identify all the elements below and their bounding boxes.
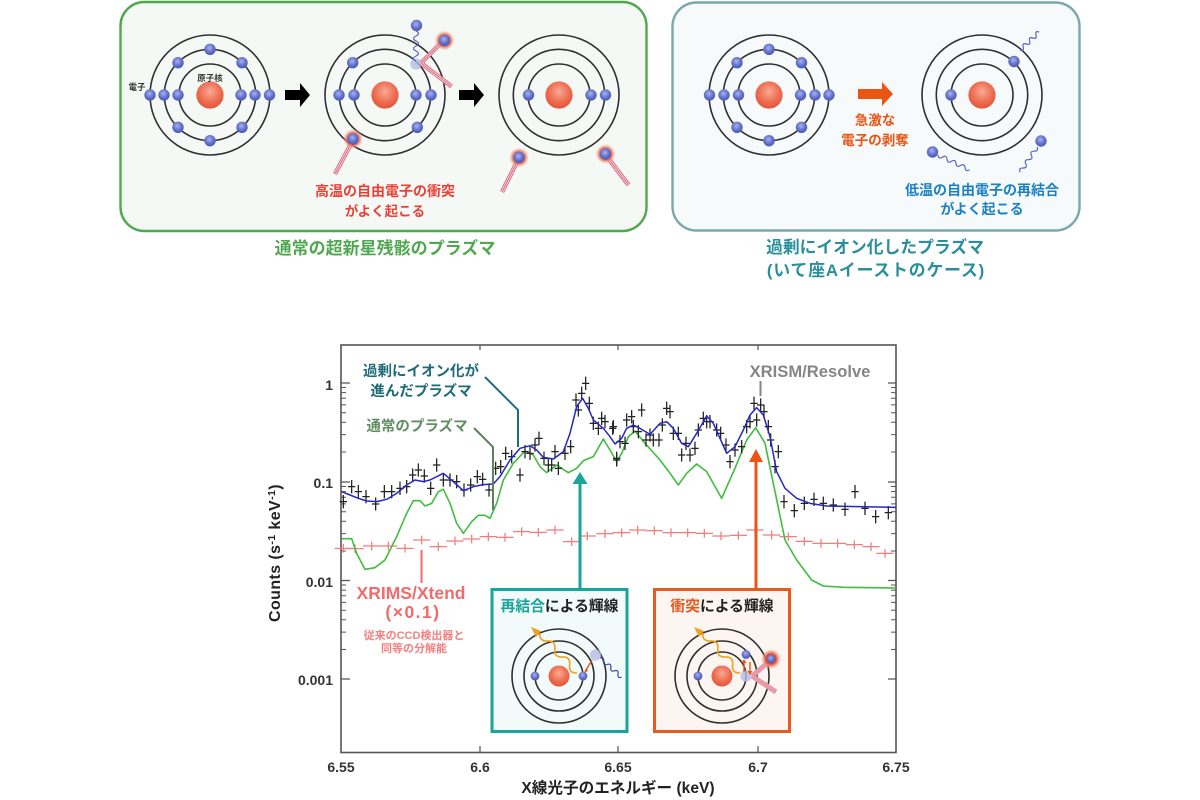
heading: over-ionized plasma: (いて座Aイーストのケース) (767, 261, 985, 280)
leader: XRISM/Resolve (760, 381, 762, 396)
label: over-ionized plasma: 進んだプラズマ (370, 382, 472, 400)
y-axis title: ) (267, 484, 284, 490)
atom 3: after collision (499, 35, 628, 192)
x-axis tick labels: 6.75 (882, 759, 910, 775)
inset: collision line (654, 590, 790, 732)
y-axis tick labels: 0.01 (306, 574, 333, 590)
caption: hot electron collisions: 高温の自由電子の衝突 (315, 183, 455, 199)
y-axis title: -1 (266, 490, 278, 500)
series: XRISM/Xtend red crosses (343, 530, 885, 553)
label: normal plasma: 通常のプラズマ (366, 417, 468, 435)
plot frame and ticks (341, 345, 896, 752)
x-axis tick labels: 6.6 (470, 759, 490, 775)
chart: X-ray spectrum (266, 345, 910, 797)
series: XRISM/Resolve black data crosses (343, 383, 888, 517)
caption: cold electron recombination (905, 182, 1059, 217)
atom 4: full electrons (704, 35, 835, 155)
arrow: orange (858, 82, 893, 106)
y-axis title: Counts (s (267, 545, 284, 622)
x-axis tick labels: 6.65 (604, 759, 632, 775)
y-axis title: -1 (266, 534, 278, 545)
atom 1: full electrons (144, 35, 275, 155)
panel: normal supernova remnant plasma (120, 2, 646, 231)
label: XRIMS/Xtend (357, 583, 465, 655)
x-axis tick labels (327, 759, 910, 775)
caption: hot electron collisions: がよく起こる (345, 203, 425, 219)
caption: rapid electron stripping (841, 112, 909, 148)
arrow: teal to recombination lines (578, 482, 582, 589)
label: XRIMS/Xtend: XRIMS/Xtend (357, 583, 465, 603)
heading: over-ionized plasma: 過剰にイオン化したプラズマ (766, 237, 984, 257)
heading: normal plasma: 通常の超新星残骸のプラズマ (275, 238, 495, 258)
y-axis tick labels: 0.001 (298, 672, 333, 688)
x-axis tick labels: 6.55 (327, 759, 355, 775)
leader: normal plasma (474, 428, 493, 510)
arrow: orange to collision lines (754, 460, 758, 589)
label: XRIMS/Xtend: (×0.1) (385, 602, 441, 622)
y-axis tick labels: 0.1 (314, 475, 333, 491)
series: normal plasma green model (342, 428, 896, 588)
label: XRIMS/Xtend: 従来のCCD検出器と (364, 628, 464, 642)
arrowhead: orange (749, 449, 763, 462)
label: nucleus: 原子核 (197, 73, 223, 83)
series: over-ionized plasma blue model (342, 398, 896, 507)
x-axis title: X線光子のエネルギー (keV) (521, 778, 715, 797)
arrow: black 1 (285, 83, 310, 107)
y-axis tick labels: 1 (325, 377, 333, 393)
inset: recombination line: 再結合による輝線 (501, 597, 619, 615)
label: electron: 電子 (128, 82, 146, 92)
leader: XRIMS/Xtend (420, 550, 422, 583)
label: over-ionized plasma (363, 362, 479, 400)
caption: cold electron recombination: がよく起こる (940, 201, 1024, 217)
atom 5: stripped electrons (922, 32, 1047, 172)
inset: recombination line (492, 590, 627, 732)
y-axis title: keV (267, 500, 284, 534)
heading: over-ionized plasma (766, 237, 985, 280)
arrow: black 2 (459, 83, 484, 107)
inset: collision line: 衝突による輝線 (670, 597, 774, 615)
y-axis tick labels (298, 377, 333, 688)
caption: cold electron recombination: 低温の自由電子の再結合 (905, 182, 1059, 198)
arrowhead: teal (572, 472, 588, 484)
caption: hot electron collisions (315, 183, 455, 219)
label: over-ionized plasma: 過剰にイオン化が (363, 362, 479, 380)
leader: over-ionized plasma (485, 377, 518, 447)
atom 2: collision (325, 20, 454, 174)
label: XRISM/Resolve: XRISM/Resolve (750, 362, 870, 381)
caption: rapid electron stripping: 電子の剥奪 (841, 132, 909, 148)
label: XRIMS/Xtend: 同等の分解能 (381, 641, 447, 655)
panel: over-ionized plasma (672, 2, 1080, 230)
x-axis tick labels: 6.7 (748, 759, 768, 775)
caption: rapid electron stripping: 急激な (855, 112, 895, 128)
